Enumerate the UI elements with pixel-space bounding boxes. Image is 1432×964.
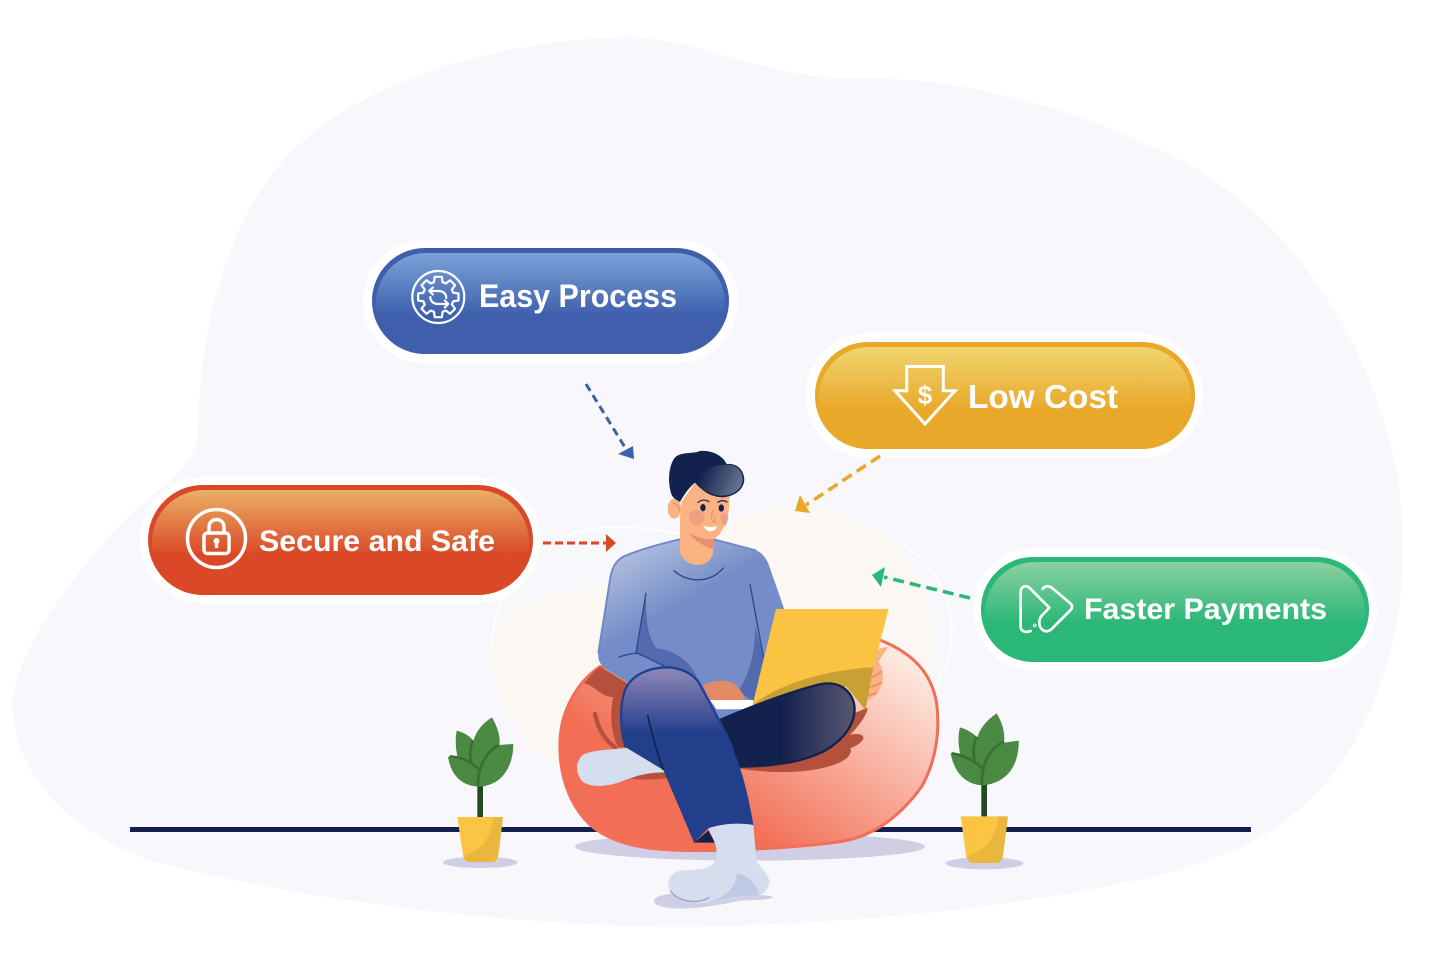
back leg	[720, 683, 855, 767]
sock: front foot	[668, 824, 769, 903]
label: Secure and Safe: Secure and Safe	[259, 525, 495, 558]
ear	[668, 499, 681, 519]
person on beanbag illustration	[560, 451, 938, 908]
pill: Easy Process	[363, 240, 738, 363]
label: Faster Payments: Faster Payments	[1084, 593, 1327, 626]
beanbag shading	[584, 667, 630, 747]
hands and forearm	[703, 681, 746, 702]
sweater	[598, 539, 784, 720]
hair highlight	[697, 465, 743, 496]
hair	[669, 451, 744, 502]
arrow: red	[543, 534, 616, 552]
sweater shadow	[637, 593, 697, 678]
plant: right	[945, 713, 1023, 869]
sweater seams	[619, 568, 763, 667]
beanbag	[560, 640, 938, 851]
icon: fast forward	[1021, 586, 1072, 632]
plant: left	[443, 717, 518, 868]
icon: down arrow with dollar	[895, 366, 955, 424]
icon: padlock	[188, 510, 246, 568]
foot shadow	[654, 893, 772, 908]
label: Easy Process: Easy Process	[479, 278, 677, 314]
neck and face	[680, 483, 730, 565]
pill: Faster Payments	[973, 549, 1377, 670]
beanbag shadow	[575, 833, 925, 861]
cream backdrop behind person	[490, 507, 933, 770]
pill: Low Cost	[806, 333, 1203, 458]
floor line	[130, 827, 1251, 832]
sock: crossed foot	[577, 745, 667, 786]
arrow: orange	[795, 456, 880, 513]
icon: gear with arrows	[412, 271, 464, 323]
laptop shadow	[753, 667, 873, 710]
label: Low Cost: Low Cost	[968, 378, 1118, 415]
icon: down arrow with dollar: $	[918, 380, 933, 410]
front leg	[621, 667, 753, 843]
laptop base	[710, 700, 753, 709]
arrow: green	[872, 567, 970, 598]
laptop screen	[753, 609, 889, 710]
pill: Secure and Safe	[140, 477, 541, 603]
facial features	[689, 500, 728, 531]
arrow: blue	[586, 384, 634, 459]
backdrop outline arcs	[491, 527, 952, 692]
